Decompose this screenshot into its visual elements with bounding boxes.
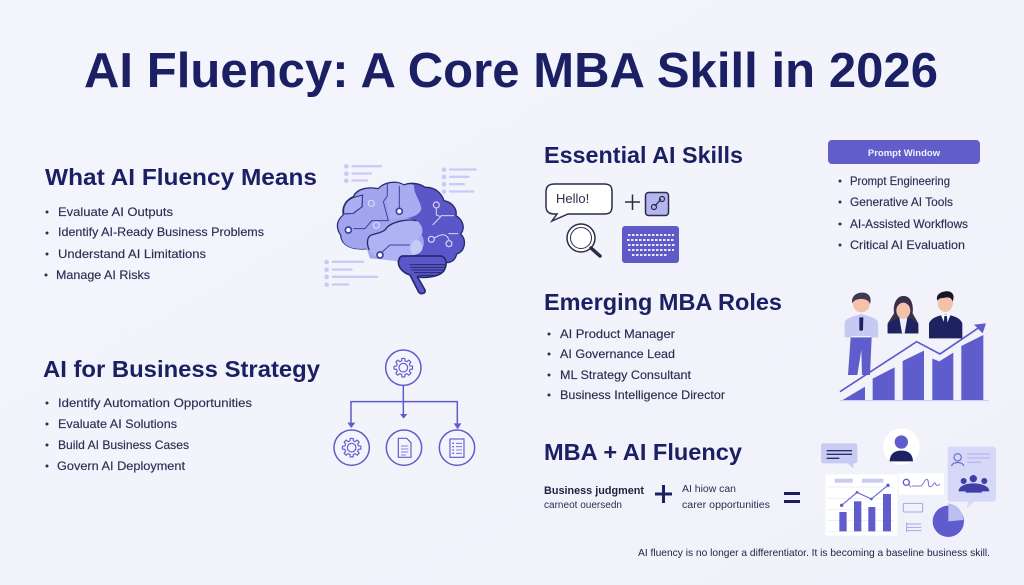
equals sign (784, 494, 800, 502)
plus sign (655, 485, 672, 503)
closing statement: AI fluency is no longer a differentiator. It is becoming a baseline business skill. (638, 547, 990, 559)
mini widgets (903, 503, 923, 532)
person: woman (888, 296, 918, 333)
equation text: business judgment (544, 485, 644, 511)
button: prompt window (828, 140, 980, 164)
profile card (948, 447, 996, 509)
bullet list: skills: Critical AI Evaluation (850, 238, 965, 252)
bullet list: fluency: Manage AI Risks (56, 268, 150, 282)
person: right man (929, 291, 962, 338)
bullet list: skills: AI-Assisted Workflows (850, 217, 968, 231)
icon: Hello speech bubble: Hello! (556, 191, 589, 206)
growth arrow (840, 323, 986, 392)
button: prompt window: Prompt Window (868, 148, 941, 159)
heading: AI for business strategy: AI for Business Strategy (43, 356, 320, 382)
person: left man (845, 293, 878, 375)
bullet list: roles: ML Strategy Consultant (560, 368, 692, 382)
icon: keyboard (622, 226, 679, 263)
bullet list: strategy (46, 396, 252, 473)
title: AI Fluency: A Core MBA Skill in 2026 (84, 44, 938, 98)
bullet list: skills: Generative AI Tools (850, 195, 953, 209)
equation text: business judgment: carneot ouersedn (544, 500, 622, 511)
search card (898, 473, 944, 495)
illustration: professionals over growth chart (840, 291, 989, 401)
panel: what AI fluency means (44, 164, 477, 294)
pie chart (933, 503, 964, 537)
bullet list: strategy: Build AI Business Cases (58, 438, 189, 452)
growth bars (843, 335, 983, 400)
panel: MBA + AI fluency (544, 428, 996, 559)
bullet list: skills: Prompt Engineering (850, 174, 950, 188)
equation text: AI (682, 484, 770, 511)
panel: AI for business strategy (43, 350, 475, 473)
illustration: analytics dashboard (821, 428, 996, 537)
icon: plus (625, 194, 640, 210)
panel: emerging MBA roles (544, 289, 989, 402)
bullet list: fluency: Understand AI Limitations (58, 247, 206, 261)
diagram: gear flow tree (334, 350, 475, 465)
icon: brain with circuits (324, 164, 477, 294)
bullet list: strategy: Govern AI Deployment (57, 459, 186, 473)
icon: node link tile (646, 192, 668, 216)
heading: emerging MBA roles: Emerging MBA Roles (544, 289, 782, 315)
heading: MBA + AI fluency: MBA + AI Fluency (544, 439, 742, 465)
bullet list: roles (548, 327, 725, 402)
heading: what AI fluency means: What AI Fluency Means (45, 164, 317, 190)
icon: Hello speech bubble (546, 184, 612, 221)
bullet list: roles: AI Product Manager (560, 327, 675, 341)
bullet list: roles: Business Intelligence Director (560, 388, 725, 402)
bullet list: strategy: Evaluate AI Solutions (58, 417, 177, 431)
bullet list: fluency (44, 205, 264, 282)
bullet list: skills (838, 174, 968, 252)
equation text: AI: AI hiow can (682, 484, 736, 495)
avatar (883, 428, 920, 465)
equation text: business judgment: Business judgment (544, 485, 644, 497)
equation text: AI: carer opportunities (682, 500, 770, 511)
bullet list: strategy: Identify Automation Opportunities (58, 396, 252, 410)
bullet list: fluency: Evaluate AI Outputs (58, 205, 173, 219)
panel: essential AI skills (544, 140, 980, 263)
chat bubble (821, 443, 857, 468)
chart card (825, 474, 897, 536)
icon: magnifying glass (567, 224, 600, 256)
bullet list: fluency: Identify AI-Ready Business Problems (58, 225, 264, 239)
heading: essential AI skills: Essential AI Skills (544, 142, 743, 168)
bullet list: roles: AI Governance Lead (560, 347, 675, 361)
